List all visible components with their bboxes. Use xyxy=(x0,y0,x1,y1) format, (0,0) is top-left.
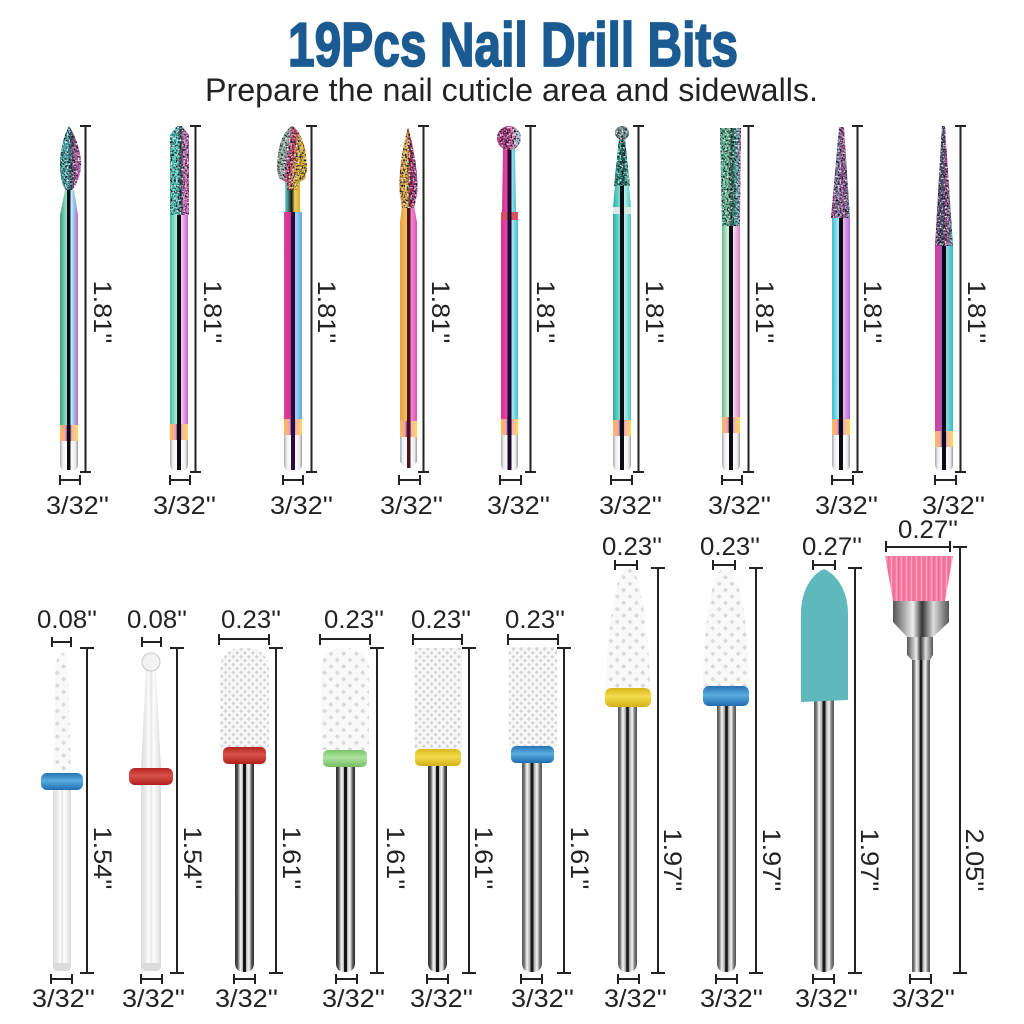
shank dimension 3: 3/32'' xyxy=(270,492,333,520)
length dimension 5 xyxy=(525,126,559,472)
length dimension 13: 1.61'' xyxy=(381,827,409,889)
bit 6: rainbow small ball xyxy=(613,126,631,471)
bit 1: rainbow flame xyxy=(60,126,81,471)
length dimension 5: 1.81'' xyxy=(531,281,559,343)
bit 5: rainbow ball xyxy=(497,126,521,471)
head width dimension 13 xyxy=(320,606,384,645)
panel: ceramic and polishing bits row xyxy=(32,516,988,1013)
length dimension 15 xyxy=(557,648,593,973)
bit 11: clear ceramic ball xyxy=(129,653,173,971)
bit 2: rainbow cylinder xyxy=(170,126,189,471)
length dimension 2: 1.81'' xyxy=(198,281,226,343)
length dimension 9 xyxy=(955,126,990,472)
shank dimension 4 xyxy=(380,475,443,520)
length dimension 6: 1.81'' xyxy=(640,281,668,343)
length dimension 9: 1.81'' xyxy=(962,281,990,343)
shank dimension 16: 3/32'' xyxy=(604,985,667,1013)
panel: rainbow diamond bits row xyxy=(46,126,990,520)
shank dimension 9: 3/32'' xyxy=(922,492,985,520)
length dimension 17: 1.97'' xyxy=(757,829,785,891)
length dimension 4: 1.81'' xyxy=(426,281,454,343)
head width dimension 14: 0.23'' xyxy=(411,606,471,634)
bit 9: rainbow needle xyxy=(935,126,953,471)
bit 7: rainbow long cylinder xyxy=(720,128,741,471)
shank dimension 9 xyxy=(922,475,985,520)
length dimension 11: 1.54'' xyxy=(178,827,206,889)
shank dimension 6: 3/32'' xyxy=(599,492,662,520)
head width dimension 15: 0.23'' xyxy=(505,606,565,634)
bit 10: clear ceramic cone xyxy=(41,652,83,971)
shank dimension 7: 3/32'' xyxy=(708,492,771,520)
shank dimension 3 xyxy=(270,475,333,520)
length dimension 17 xyxy=(749,568,785,973)
shank dimension 10 xyxy=(32,974,95,1013)
shank dimension 16 xyxy=(604,974,667,1013)
length dimension 16: 1.97'' xyxy=(658,829,686,891)
bit 3: rainbow bullet xyxy=(277,126,307,471)
length dimension 16 xyxy=(651,568,686,973)
length dimension 8 xyxy=(852,126,886,472)
shank dimension 2: 3/32'' xyxy=(153,492,216,520)
length dimension 1 xyxy=(80,126,116,472)
length dimension 2 xyxy=(190,126,226,472)
shank dimension 17 xyxy=(700,974,763,1013)
length dimension 12 xyxy=(269,648,305,973)
length dimension 13 xyxy=(370,648,409,973)
title: 19Pcs Nail Drill Bits xyxy=(288,11,738,80)
head width dimension 18: 0.27'' xyxy=(802,533,862,561)
shank dimension 14: 3/32'' xyxy=(410,985,473,1013)
bit 18: teal polishing cone xyxy=(801,569,848,972)
shank dimension 14 xyxy=(410,974,473,1013)
length dimension 11 xyxy=(170,648,206,973)
shank dimension 5: 3/32'' xyxy=(487,492,550,520)
bit 12: ceramic rounded barrel, red ring xyxy=(220,648,269,972)
shank dimension 4: 3/32'' xyxy=(380,492,443,520)
shank dimension 15 xyxy=(511,974,574,1013)
head width dimension 19 xyxy=(886,516,958,552)
shank dimension 11 xyxy=(122,974,185,1013)
shank dimension 11: 3/32'' xyxy=(122,985,185,1013)
length dimension 19: 2.05'' xyxy=(960,829,988,891)
length dimension 18 xyxy=(848,568,883,973)
shank dimension 13 xyxy=(322,974,385,1013)
head width dimension 13: 0.23'' xyxy=(324,606,384,634)
length dimension 4 xyxy=(418,126,454,472)
length dimension 3 xyxy=(306,126,340,472)
head width dimension 11 xyxy=(127,606,187,647)
length dimension 1: 1.81'' xyxy=(88,281,116,343)
bit 13: ceramic rounded barrel, green ring xyxy=(321,648,369,972)
head width dimension 12 xyxy=(219,606,281,645)
shank dimension 18 xyxy=(795,974,858,1013)
bit 17: ceramic flame, blue ring xyxy=(703,568,749,972)
length dimension 10 xyxy=(80,648,116,973)
shank dimension 12 xyxy=(215,974,278,1013)
head width dimension 16: 0.23'' xyxy=(602,533,662,561)
shank dimension 1 xyxy=(46,475,109,520)
head width dimension 17: 0.23'' xyxy=(700,533,760,561)
bit 4: rainbow needle flame xyxy=(399,127,417,471)
shank dimension 6 xyxy=(599,475,662,520)
length dimension 3: 1.81'' xyxy=(312,281,340,343)
head width dimension 19: 0.27'' xyxy=(898,516,958,544)
length dimension 14 xyxy=(462,648,497,973)
shank dimension 5 xyxy=(487,475,550,520)
shank dimension 10: 3/32'' xyxy=(32,985,95,1013)
length dimension 15: 1.61'' xyxy=(565,827,593,889)
shank dimension 8 xyxy=(815,475,878,520)
shank dimension 19 xyxy=(892,974,955,1013)
shank dimension 13: 3/32'' xyxy=(322,985,385,1013)
head width dimension 11: 0.08'' xyxy=(127,606,187,634)
length dimension 14: 1.61'' xyxy=(469,827,497,889)
shank dimension 2 xyxy=(153,475,216,520)
subtitle: Prepare the nail cuticle area and sidewalls. xyxy=(205,72,818,108)
length dimension 8: 1.81'' xyxy=(858,281,886,343)
head width dimension 14 xyxy=(411,606,471,645)
length dimension 7: 1.81'' xyxy=(750,281,778,343)
length dimension 19 xyxy=(953,547,988,973)
shank dimension 15: 3/32'' xyxy=(511,985,574,1013)
head width dimension 10 xyxy=(37,606,97,647)
bit 15: ceramic flat barrel, blue ring xyxy=(509,647,557,972)
bit 14: ceramic flat barrel, yellow ring xyxy=(414,648,462,972)
bit 19: pink nylon brush xyxy=(885,556,953,972)
head width dimension 12: 0.23'' xyxy=(221,606,281,634)
length dimension 6 xyxy=(633,126,668,472)
shank dimension 18: 3/32'' xyxy=(795,985,858,1013)
bit 16: ceramic flame, yellow ring xyxy=(605,568,651,972)
head width dimension 15 xyxy=(505,606,565,645)
head width dimension 10: 0.08'' xyxy=(37,606,97,634)
shank dimension 17: 3/32'' xyxy=(700,985,763,1013)
shank dimension 19: 3/32'' xyxy=(892,985,955,1013)
length dimension 12: 1.61'' xyxy=(277,827,305,889)
length dimension 10: 1.54'' xyxy=(88,827,116,889)
shank dimension 12: 3/32'' xyxy=(215,985,278,1013)
bit 8: rainbow taper xyxy=(831,127,850,471)
shank dimension 7 xyxy=(708,475,771,520)
shank dimension 8: 3/32'' xyxy=(815,492,878,520)
shank dimension 1: 3/32'' xyxy=(46,492,109,520)
length dimension 18: 1.97'' xyxy=(855,829,883,891)
length dimension 7 xyxy=(743,126,778,472)
